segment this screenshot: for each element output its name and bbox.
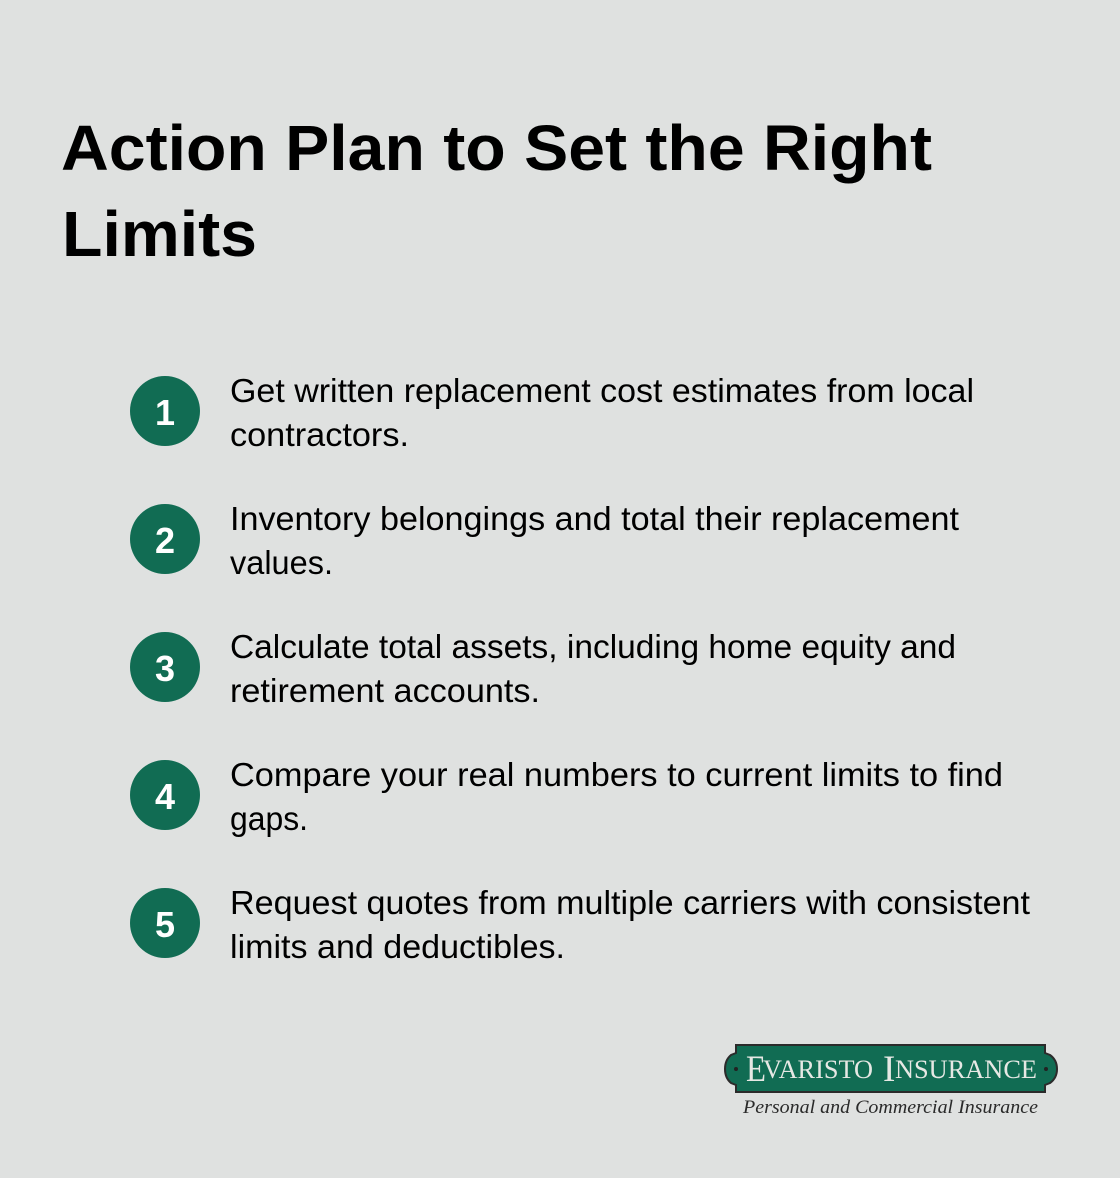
logo: Evaristo Insurance: I bbox=[883, 1049, 895, 1090]
number badge 1 bbox=[130, 376, 200, 446]
logo tagline: Personal and Commercial Insurance bbox=[742, 1097, 1038, 1118]
title: Limits bbox=[62, 198, 257, 270]
logo plaque bbox=[725, 1045, 1057, 1092]
step 3 bbox=[130, 628, 956, 709]
step 4 text bbox=[230, 756, 1003, 837]
step 2 text bbox=[230, 500, 959, 581]
step 1 text: Get written replacement cost estimates from local bbox=[230, 372, 974, 409]
number badge 4: 4 bbox=[155, 776, 175, 817]
logo: Evaristo Insurance bbox=[725, 1045, 1057, 1118]
step 4 bbox=[130, 756, 1003, 837]
step 3 text: retirement accounts. bbox=[230, 672, 540, 709]
number badge 1: 1 bbox=[155, 392, 175, 433]
step 4 text: Compare your real numbers to current limits to find bbox=[230, 756, 1003, 793]
number badge 4 bbox=[130, 760, 200, 830]
number badge 2 bbox=[130, 504, 200, 574]
title: Action Plan to Set the Right bbox=[61, 112, 932, 184]
step 5 text: limits and deductibles. bbox=[230, 928, 565, 965]
number badge 5 bbox=[130, 888, 200, 958]
step 2 bbox=[130, 500, 959, 581]
step 2 text: Inventory belongings and total their replacement bbox=[230, 500, 959, 537]
step 3 text: Calculate total assets, including home equity and bbox=[230, 628, 956, 665]
step 3 text bbox=[230, 628, 956, 709]
logo: Evaristo Insurance: NSURANCE bbox=[895, 1055, 1037, 1084]
step 1 bbox=[130, 372, 974, 453]
step 5 text bbox=[230, 884, 1030, 965]
logo: Evaristo Insurance: VARISTO bbox=[763, 1055, 873, 1084]
step 2 text: values. bbox=[230, 544, 333, 581]
title bbox=[61, 112, 932, 270]
logo dots bbox=[734, 1067, 1048, 1071]
step 5 bbox=[130, 884, 1030, 965]
step 4 text: gaps. bbox=[230, 800, 308, 837]
number badge 2: 2 bbox=[155, 520, 175, 561]
step 5 text: Request quotes from multiple carriers with consistent bbox=[230, 884, 1030, 921]
number badge 3 bbox=[130, 632, 200, 702]
step 1 text bbox=[230, 372, 974, 453]
number badge 5: 5 bbox=[155, 904, 175, 945]
logo name: E bbox=[746, 1049, 766, 1090]
step 1 text: contractors. bbox=[230, 416, 409, 453]
number badge 3: 3 bbox=[155, 648, 175, 689]
